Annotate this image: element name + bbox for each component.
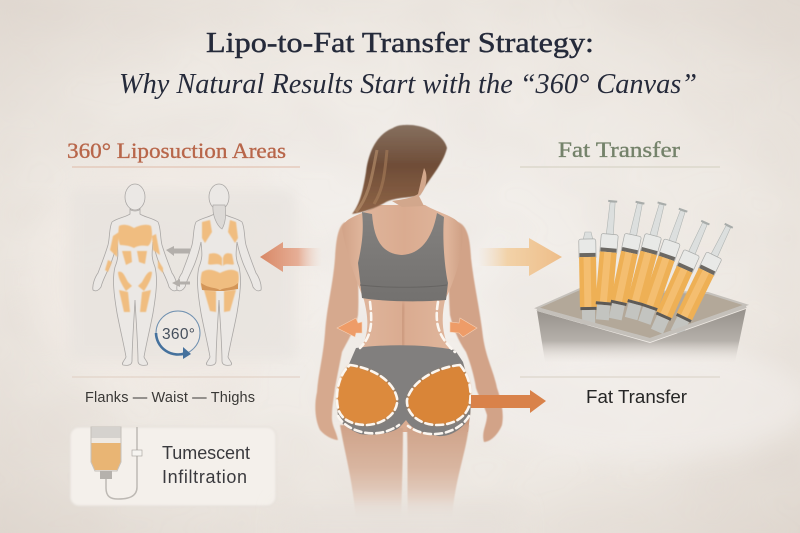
bra band line: [360, 285, 447, 287]
arms: [315, 222, 503, 442]
heading: liposuction areas: 360° Liposuction Areas: [67, 138, 286, 163]
arrow: glutes to fat transfer: [471, 390, 546, 413]
heading: fat transfer: Fat Transfer: [558, 137, 681, 162]
arrow: toward liposuction panel: [260, 242, 322, 272]
legs: [340, 425, 469, 522]
torso: [338, 205, 471, 432]
fat zones on front view: [105, 225, 163, 312]
back shadow: [402, 303, 404, 348]
fat zones on back view: [201, 220, 239, 312]
panel: 360 liposuction areas: [67, 138, 295, 506]
arrow: toward fat transfer panel: [478, 238, 562, 276]
title: [119, 28, 697, 100]
caption: treatment zones: Flanks — Waist — Thighs: [85, 390, 255, 406]
tray with syringes: [537, 200, 746, 362]
dashed contour lines: [337, 302, 471, 434]
hair: [352, 125, 447, 214]
caption: fat transfer: Fat Transfer: [586, 387, 687, 407]
glute fat transfer zones: [337, 365, 471, 425]
icon: IV bag: [91, 427, 142, 499]
decorative rules: [72, 167, 720, 377]
gray shorts: [338, 345, 471, 436]
title: Why Natural Results Start with the “360° Canvas”: [119, 69, 697, 100]
back view hair: [213, 205, 226, 229]
label: infiltration: Infiltration: [162, 467, 247, 487]
tray front: [537, 309, 746, 362]
label: tumescent: Tumescent: [162, 443, 250, 463]
gray sports bra: [358, 212, 448, 301]
syringes: [579, 200, 737, 336]
card: tumescent infiltration: [70, 427, 276, 506]
small grey arrows between figures: [166, 246, 190, 287]
panel: fat transfer: [537, 137, 746, 407]
fog over lower legs: [280, 505, 520, 533]
icon: 360 degree rotation: [156, 311, 200, 359]
woman figure: [315, 125, 503, 522]
body diagram: front and back views: [70, 184, 295, 365]
small arrows pointing to waist: [337, 318, 477, 337]
title: Lipo-to-Fat Transfer Strategy:: [206, 28, 594, 59]
tray back: [537, 289, 746, 340]
icon: 360 degree rotation: 360°: [162, 326, 195, 343]
